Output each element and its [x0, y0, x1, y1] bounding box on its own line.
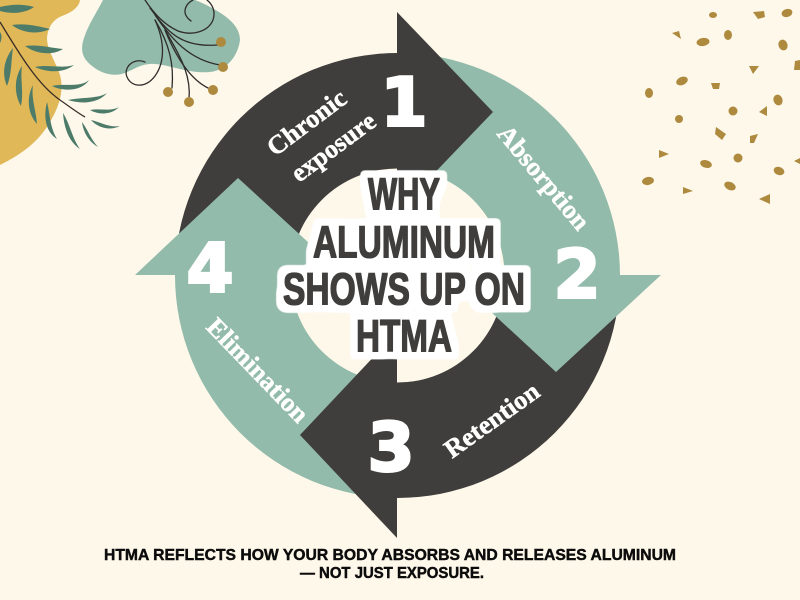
decoration: leafy branch: [0, 5, 120, 149]
number 2: 2: [554, 236, 600, 314]
decoration: flower stems with seed pods: [126, 0, 228, 107]
number 1: 1: [381, 64, 427, 142]
decoration: scattered speckles: [641, 8, 800, 204]
footer caption: HTMA REFLECTS HOW YOUR BODY ABSORBS AND RELEASES ALUMINUM: [104, 547, 676, 564]
decoration: teal blob: [82, 0, 240, 75]
title: ALUMINUM: [313, 216, 495, 268]
label: Absorption: Absorption: [491, 119, 596, 236]
arrowhead 2: [451, 275, 661, 372]
footer caption: — NOT JUST EXPOSURE.: [300, 565, 484, 582]
number 3: 3: [368, 408, 414, 486]
arrowhead 3: [300, 332, 397, 538]
arrow 3: retention: [396, 276, 620, 498]
decoration: gold blob: [0, 0, 80, 165]
title: [283, 168, 525, 362]
title: WHY: [368, 168, 440, 220]
label: Chronic: Chronic: [261, 83, 352, 162]
label: Retention: Retention: [439, 376, 545, 464]
title: SHOWS UP ON: [283, 264, 525, 314]
arrowhead 1: [397, 12, 493, 212]
center circle: [291, 168, 505, 382]
title: HTMA: [356, 310, 452, 362]
arrowhead 4: [135, 178, 344, 275]
arrow 1: chronic exposure: [175, 53, 399, 276]
arrow 4: elimination: [175, 274, 398, 498]
label: exposure: exposure: [285, 106, 381, 188]
label: Elimination: Elimination: [201, 312, 315, 429]
footer caption: [104, 547, 676, 582]
arrow 2: absorption: [398, 53, 620, 277]
number 4: 4: [187, 230, 233, 308]
